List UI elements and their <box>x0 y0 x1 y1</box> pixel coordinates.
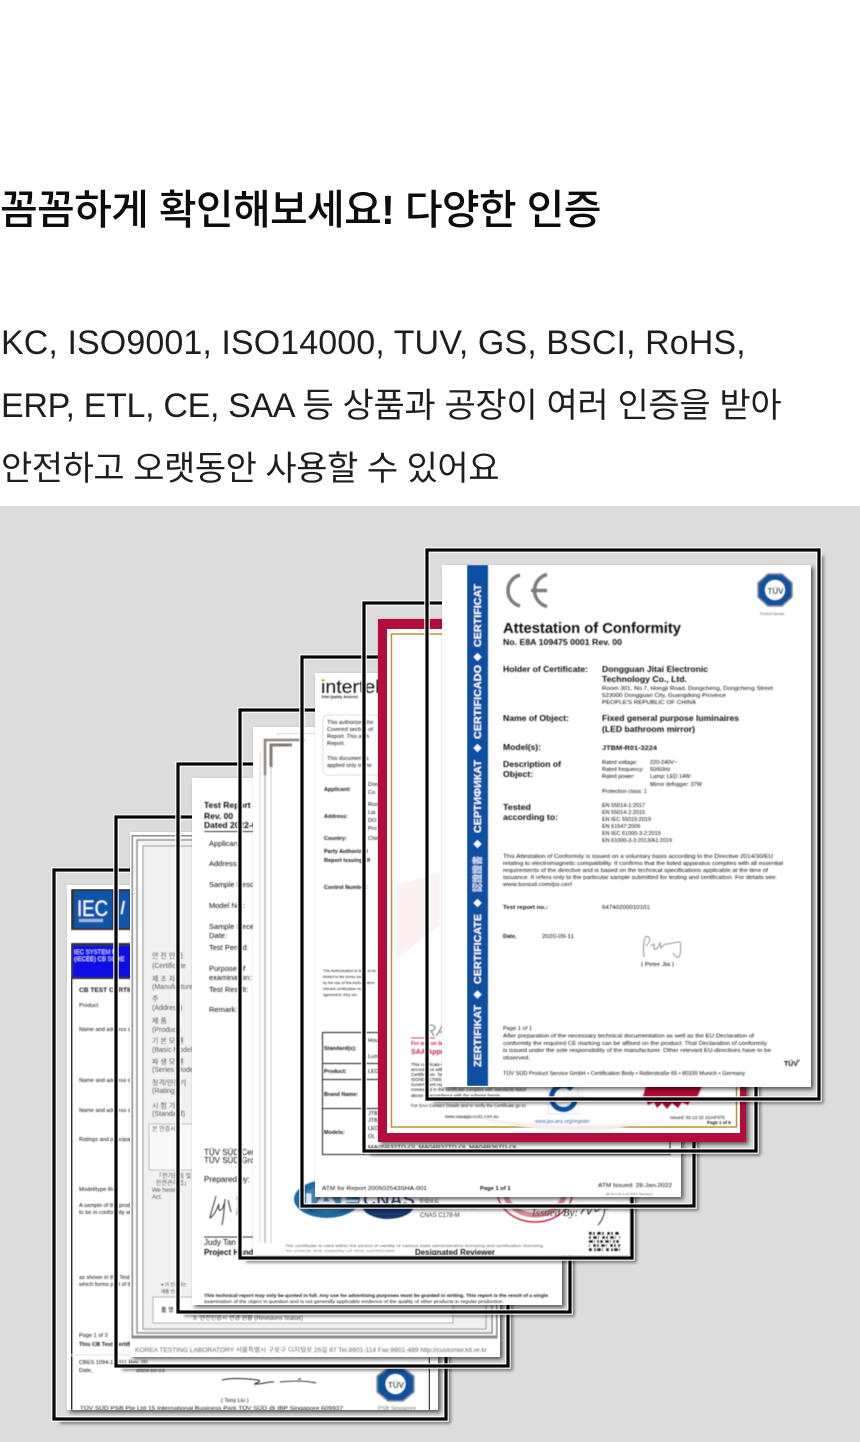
intertek labels: Co <box>368 790 375 796</box>
certificate 2 labels: 3. 안전인증서 변경 현황 (Revisions Status) <box>193 1314 303 1322</box>
text block: certification description: KC, ISO9001, ISO14000, TUV, GS, BSCI, RoHS, <box>1 324 746 362</box>
attestation statement: After preparation of the necessary technical documentation as well as the EU Declaration of <box>503 1034 755 1040</box>
report labels: Remark: <box>209 1005 237 1014</box>
certificate 2 labels: 정격/안전기 <box>152 1078 186 1087</box>
panel: certificate 4 accreditation: The certificate is valid within the period of validity of various state administrative licensing and certification licensing <box>285 1244 543 1248</box>
icon: IEC logo: I <box>120 898 125 918</box>
attestation fields: EN 55014-1:2017 <box>602 803 645 809</box>
blue side strip with certificate words: CERTIFICATE <box>473 914 484 984</box>
standards table: JTB <box>368 1118 378 1124</box>
attestation fields: Technology Co., Ltd. <box>602 675 687 684</box>
certificate 2 labels: 제 품 <box>152 1017 167 1025</box>
certificate 2 labels: 「전기용품 및 <box>156 1172 192 1180</box>
intertek labels: This Authorization to Mark is for <box>323 969 377 973</box>
certificate 2 labels: (Address) <box>152 1005 182 1012</box>
panel: certificate 5 Intertek ATM: ED 16.3.15 (1-Jul-2021) Mandatory <box>606 1192 654 1196</box>
chart: fanned stack of certificates <box>51 547 826 1426</box>
blue side strip with certificate words: ZERTIFIKAT <box>473 1005 484 1067</box>
SAA text <box>411 1021 731 1125</box>
blue scheme band: IEC SYSTEM F <box>74 950 116 956</box>
title: 꼼꼼하게 확인해보세요! 다양한 인증 <box>0 187 601 233</box>
attestation fields: Room 301, No.7, Hongji Road, Dongcheng, Dongcheng Street <box>602 686 774 692</box>
certificate 1 text: Model/type Ref. <box>79 1187 119 1193</box>
report labels: TÜV SÜD Certification <box>204 1148 284 1157</box>
icon: IAF logo <box>294 1180 360 1218</box>
attestation statement: relating to electromagnetic compatibility. It confirms that the listed apparatus complies with all essential <box>503 861 783 867</box>
SAA text: RA <box>424 1021 448 1040</box>
attestation statement: 64740200010101 <box>602 905 650 911</box>
faint watermark swoosh <box>396 872 440 960</box>
SAA text: For and on behalf <box>411 1041 453 1047</box>
report labels: Prepared by: <box>204 1175 250 1184</box>
blue scheme band <box>71 943 133 979</box>
intertek labels: Party Authorized <box>324 849 368 855</box>
report labels: TÜV SÜD Group <box>204 1156 264 1165</box>
intertek labels: Room <box>368 802 383 808</box>
panel: certificate 6 SAA red border <box>364 603 759 1154</box>
report labels: Project Handler <box>204 1248 263 1257</box>
certificate 2 labels: 주 <box>152 995 159 1003</box>
SAA text: above in accordance with the scheme herein. <box>411 1093 501 1098</box>
icon: TUV badge <box>758 574 792 616</box>
intertek labels: Country: <box>324 836 347 842</box>
standards table: LED <box>368 1126 379 1132</box>
SAA text: For SAA Contact Details and to verify the Certificate go to: <box>411 1103 527 1108</box>
text block: certification description: 안전하고 오랫동안 사용할 수 있어요 <box>1 450 499 488</box>
intertek labels: Lia <box>368 810 376 816</box>
attestation heading: Attestation of Conformity <box>503 621 681 637</box>
intertek labels: agreement, they are <box>323 993 357 997</box>
SAA text: www.jas-anz.org/register <box>535 1119 590 1125</box>
attestation fields: EN 61000-3-3:2013/A1:2019 <box>602 838 672 844</box>
certificate 1 text: Product <box>79 1003 99 1009</box>
SAA text: Issued: 02-12-22 21/AP375 <box>670 1115 725 1120</box>
certificate 2 labels: (Manufacturer <box>152 984 196 991</box>
certificate 1 text: Name and address of applicant <box>79 1027 157 1033</box>
certificate 2 labels: We hereby <box>152 1188 181 1194</box>
certificate 2 labels: (Product) <box>152 1027 181 1034</box>
attestation fields: Lamp: LED 14W <box>650 774 691 780</box>
report labels: Purpose of <box>209 964 246 973</box>
intertek labels: Control Number: <box>324 885 368 891</box>
attestation statement: Date, <box>503 934 517 940</box>
standards table: OL <box>368 1134 375 1140</box>
report heading: Rev. 00 <box>204 811 233 821</box>
panel: certificate 5 Intertek ATM <box>302 657 697 1209</box>
intertek labels <box>322 719 378 998</box>
attestation statement: www.tuvsud.com/ps-cert <box>502 882 573 888</box>
certificate 1 text: ( Tony Liu ) <box>221 1398 249 1404</box>
standards table: MA05R32TD-OL MA04R32TD-OL MA04R36TD-OL <box>368 1145 518 1151</box>
SAA text: www.saaapprovals.com.au <box>445 1114 499 1119</box>
intertek labels: Pro <box>368 826 377 832</box>
certificate 1 text: to be in conformity with <box>79 1210 136 1216</box>
attestation fields: 523000 Dongguan City, Guangdong Province <box>602 693 726 699</box>
attestation fields: Object: <box>503 770 533 779</box>
attestation fields: Fixed general purpose luminaires <box>602 714 740 723</box>
signature: Tony Liu <box>222 1378 316 1384</box>
certificate 1 text: Name and address of factory <box>79 1108 151 1114</box>
panel: certificate 5 Intertek ATM: ATM for Report 200502543SHA-001 <box>322 1186 427 1192</box>
attestation statement: Test report no.: <box>503 905 548 911</box>
standards table: Hou <box>368 1038 378 1044</box>
standards table: Models: <box>324 1130 345 1136</box>
certificate 2 labels: (Rating) <box>152 1088 177 1095</box>
report labels: Judy Tan <box>204 1238 236 1247</box>
attestation fields: Dongguan Jitai Electronic <box>602 665 709 674</box>
icon: IEC logo: IEC <box>77 896 108 921</box>
attestation statement: requirements of the directive and is based on the technical specifications applicable at the time of <box>503 868 769 874</box>
certificate 2 labels: 제품 인증 <box>161 1288 179 1295</box>
attestation fields: Name of Object: <box>503 714 569 723</box>
icon: JAS-ANZ logo <box>548 1085 584 1114</box>
panel: certificate 4 accreditation: Issued By: <box>531 1207 578 1219</box>
report labels: Sample Description <box>209 880 274 889</box>
report labels: Address: <box>209 859 239 868</box>
intertek labels: applied only of the <box>327 763 372 769</box>
standards table: Lum <box>368 1054 379 1060</box>
attestation fields: Model(s): <box>503 743 541 752</box>
certificate 1 text: as shown in the Test Report <box>79 1275 148 1281</box>
attestation fields: Tested <box>503 803 531 812</box>
report labels: Applicant: <box>209 839 242 848</box>
certificate 1 text: This CB Test Certificate <box>79 1342 142 1348</box>
icon: TUV badge: Product Service <box>760 612 785 616</box>
attestation statement: observed. <box>503 1056 531 1062</box>
certificate 1 text: TÜV SÜD PSB Pte Ltd 15 International Business Park TÜV SÜD @ IBP Singapore 609937 <box>80 1405 343 1412</box>
icon: red stamp <box>497 1158 573 1222</box>
icon: CNAS logo <box>360 1190 418 1219</box>
SAA text: nominated in the certificate complies with standards listed <box>411 1087 526 1092</box>
attestation fields: EN IEC 61000-3-2:2019 <box>602 831 661 837</box>
intertek labels: by the use of this Authorization <box>323 981 375 985</box>
SAA text: This certificate is <box>411 1062 445 1067</box>
panel: grey certificate background <box>0 506 860 1442</box>
SAA text: Certification. Tests <box>411 1072 448 1077</box>
certificate 1 text: CBES 1094-1-0011 Rev. 00 <box>79 1360 148 1366</box>
attestation fields: EN 55014-2:2015 <box>602 810 645 816</box>
attestation heading <box>503 621 681 647</box>
attestation statement: ( Peter Jia ) <box>641 962 674 968</box>
standards table: JTB <box>368 1111 378 1117</box>
text block: certification description: ERP, ETL, CE, SAA 등 상품과 공장이 여러 인증을 받아 <box>1 387 781 425</box>
report labels: Sample Received <box>209 922 268 931</box>
attestation fields: Holder of Certificate: <box>503 665 588 674</box>
attestation heading: No. E8A 109475 0001 Rev. 00 <box>503 638 623 647</box>
attestation fields: Mirror defogger: 37W <box>650 782 703 788</box>
signature: Peter Jia <box>643 937 681 957</box>
icon: TUV SUD badge: TÜV <box>388 1381 405 1390</box>
certificate 2 labels <box>135 951 487 1354</box>
intertek labels: Intertek certification mark <box>323 987 366 991</box>
certificate 2 labels: KOREA TESTING LABORATORY 서울특별시 구로구 디지털로 26길 87 Tel.8601-114 Fax:8601-489 http://customer.ktl.re.kr <box>135 1346 487 1354</box>
attestation fields: JTBM-R01-3224 <box>602 745 657 752</box>
attestation fields: 50/60Hz <box>650 767 671 773</box>
report labels: examination: <box>209 973 252 982</box>
intertek labels: Applicant: <box>324 787 351 793</box>
standards table: Brand Name: <box>324 1092 358 1098</box>
certificate 1 text: 2023-10-13 <box>136 1368 165 1374</box>
panel: certificate 3 TUV test report <box>178 764 573 1315</box>
certificate 2 labels: 파 생 모 델 <box>152 1057 184 1066</box>
certificate 2 labels: (Basic Model <box>152 1047 193 1054</box>
attestation statement: 2020-09-11 <box>542 934 574 940</box>
attestation fields: 220-240V~ <box>650 760 677 766</box>
intertek labels: Report. <box>327 741 346 747</box>
attestation fields: Description of <box>503 760 561 769</box>
report labels: Test Period: <box>209 943 249 952</box>
blue scheme band: (IECEE) CB SCHE <box>74 957 124 963</box>
certificate 1 text: CB TEST CERTIFICATE <box>79 987 153 994</box>
icon: CNAS logo: CNAS <box>363 1190 415 1210</box>
icon: CE mark <box>508 574 547 606</box>
blue side strip with certificate words: СЕРТИФИКАТ <box>473 760 484 833</box>
blue side strip with certificate words <box>467 565 488 1086</box>
standards table: Standard(s): <box>324 1046 357 1052</box>
blue side strip with certificate words: CERTIFICAT <box>473 584 484 647</box>
intertek labels: Report Issuing Of <box>324 858 370 864</box>
panel: certificate 4 accreditation: To check the validity of this certificate <box>285 1249 395 1253</box>
blue side strip with certificate words: CERTIFICADO <box>473 665 484 739</box>
panel: certificate 5 Intertek ATM: ATM Issued: 28-Jan-2022 <box>598 1183 672 1189</box>
certificate 2 labels: ● 이 인증서는 <box>161 1281 187 1288</box>
intertek labels: limited to the terms and <box>323 975 362 979</box>
attestation fields: EN 61547:2009 <box>602 824 640 830</box>
attestation fields: according to: <box>503 813 558 822</box>
signature: Mingjun <box>580 1208 609 1226</box>
logo: intertek: intertek <box>321 677 386 697</box>
panel: certificate 5 Intertek ATM: Page 1 of 1 <box>480 1186 511 1192</box>
attestation fields: Rated power: <box>602 774 635 780</box>
certificate 1 text: A sample of the product was tested <box>79 1203 166 1209</box>
attestation fields: Protection class: 1 <box>602 789 647 795</box>
panel: certificate 7 TUV attestation of conformity <box>427 550 822 1102</box>
SAA text: Government reg <box>411 1082 444 1087</box>
attestation fields: EN IEC 55015:2019 <box>602 817 651 823</box>
certificate 2 labels: (Series Model <box>152 1067 196 1074</box>
certificate 1 text: PSB Singapore <box>378 1406 416 1412</box>
attestation fields: (LED bathroom mirror) <box>602 725 695 734</box>
attestation statement: is issued under the sole responsibility of the manufacturer. Other relevant EU-directives have to be <box>503 1048 771 1054</box>
certificate 2 labels: 안전관리법」 <box>156 1179 190 1187</box>
intertek labels: This authorizes the <box>327 720 373 726</box>
SAA text: Page 1 of 9 <box>707 1120 731 1125</box>
certificate 1 text: Date, <box>79 1368 93 1374</box>
report labels: examination of the object in question and is not generally applicable evidence of the quality of other products in regular production. <box>204 1299 504 1304</box>
certificate 1 text <box>78 987 416 1412</box>
text block: certification description <box>1 324 781 488</box>
attestation fields: Rated frequency: <box>602 767 644 773</box>
certificate 2 labels: 안 전 인 증 <box>152 951 184 960</box>
report labels: Model No.: <box>209 901 245 910</box>
certificate 2 labels: Act. <box>152 1195 163 1201</box>
certificate 2 labels: 품 명 <box>161 1306 174 1314</box>
attestation statement: ® <box>797 1058 800 1063</box>
report heading: Test Report <box>204 800 251 810</box>
certificate 2 labels: 기 본 모 델 <box>152 1036 184 1045</box>
intertek labels: Report. This auth <box>327 734 369 740</box>
standards table: Product: <box>324 1069 347 1075</box>
attestation fields: Rated voltage: <box>602 760 638 766</box>
report labels: Test Result: <box>209 985 248 994</box>
signature: Judy <box>210 1196 238 1225</box>
certificate 2 labels: 본 인증서는 <box>152 1125 182 1133</box>
intertek labels: Address: <box>324 814 348 820</box>
icon: TUV SUD badge <box>377 1368 414 1401</box>
decorative corner border <box>260 733 320 1243</box>
icon: QR code <box>589 1232 620 1250</box>
intertek labels: DO <box>368 818 377 824</box>
certificate 2 labels: (Certificate <box>152 963 186 970</box>
attestation fields <box>503 665 774 844</box>
certificate 2 labels: (Standard) <box>152 1111 185 1118</box>
panel: certificate 4 accreditation <box>240 710 635 1261</box>
blue side strip with certificate words: 認證證書 <box>471 856 484 892</box>
panel: certificate 4 accreditation: 管理体系 <box>419 1198 439 1205</box>
attestation statement: This Attestation of Conformity is issued on a voluntary basis according to the Directive 2014/30/EU <box>503 854 773 860</box>
certificate 2 labels: 시 험 기 <box>152 1101 175 1110</box>
certificate 1 text: Page 1 of 3 <box>79 1333 108 1339</box>
panel: certificate 4 accreditation: CNAS C178-M <box>420 1213 460 1219</box>
SAA text: ISO/IEC 17065 <box>411 1077 442 1082</box>
panel: certificate 2 KTL safety <box>116 817 511 1369</box>
SAA text: accordance with <box>411 1067 444 1072</box>
panel: certificate 4 accreditation: Designated Reviewer <box>415 1248 495 1257</box>
report labels <box>204 839 548 1304</box>
certificate 1 text: Name and address of manufacturer <box>79 1078 167 1084</box>
icon: IEC logo <box>71 889 135 930</box>
panel: certificate 1 IEC CB <box>54 870 449 1422</box>
report labels: This technical report may only be quoted in full. Any use for advertising purposes must be granted in writing. This report is the result of a single <box>204 1293 548 1299</box>
attestation statement: conformity the required CE marking can be affixed on the product. That Declaration of conformity <box>503 1041 767 1047</box>
icon: TUV badge: TÜV <box>768 587 784 596</box>
attestation statement: Page 1 of 1 <box>503 1026 532 1032</box>
standards table: LED <box>368 1069 379 1075</box>
SAA text: SAA Approval <box>411 1049 458 1056</box>
attestation statement: TÜV <box>784 1059 798 1068</box>
certificate 2 labels: 제 조 자 <box>152 974 176 983</box>
attestation statement: TÜV SÜD Product Service GmbH • Certification Body • Ridlerstraße 65 • 80339 Munich • Germany <box>503 1070 745 1077</box>
report heading: Dated 2022-01 <box>204 820 261 830</box>
standards table <box>322 1032 670 1155</box>
attestation statement: issuance. It refers only to the particular sample submitted for testing and certification. For details see: <box>503 875 778 881</box>
certificate 1 text: Ratings and principal characteristics <box>79 1137 169 1143</box>
icon: red seal <box>642 1086 702 1109</box>
attestation statement <box>502 854 800 1077</box>
icon: IAF logo: IAF <box>304 1191 360 1212</box>
panel: certificate 4 accreditation: MANAGEMENT SYSTEM <box>420 1205 478 1211</box>
report heading <box>204 801 253 829</box>
logo: intertek: Total Quality. Assured. <box>321 695 358 699</box>
intertek labels: Dongguan <box>368 782 393 788</box>
report labels: Date: <box>209 931 227 940</box>
certificate 1 text: which forms part of this <box>78 1282 137 1288</box>
attestation fields: PEOPLE'S REPUBLIC OF CHINA <box>602 700 696 706</box>
intertek labels: Covered section of <box>327 727 373 733</box>
intertek labels: China <box>368 836 383 842</box>
intertek labels: This document is <box>327 756 369 762</box>
